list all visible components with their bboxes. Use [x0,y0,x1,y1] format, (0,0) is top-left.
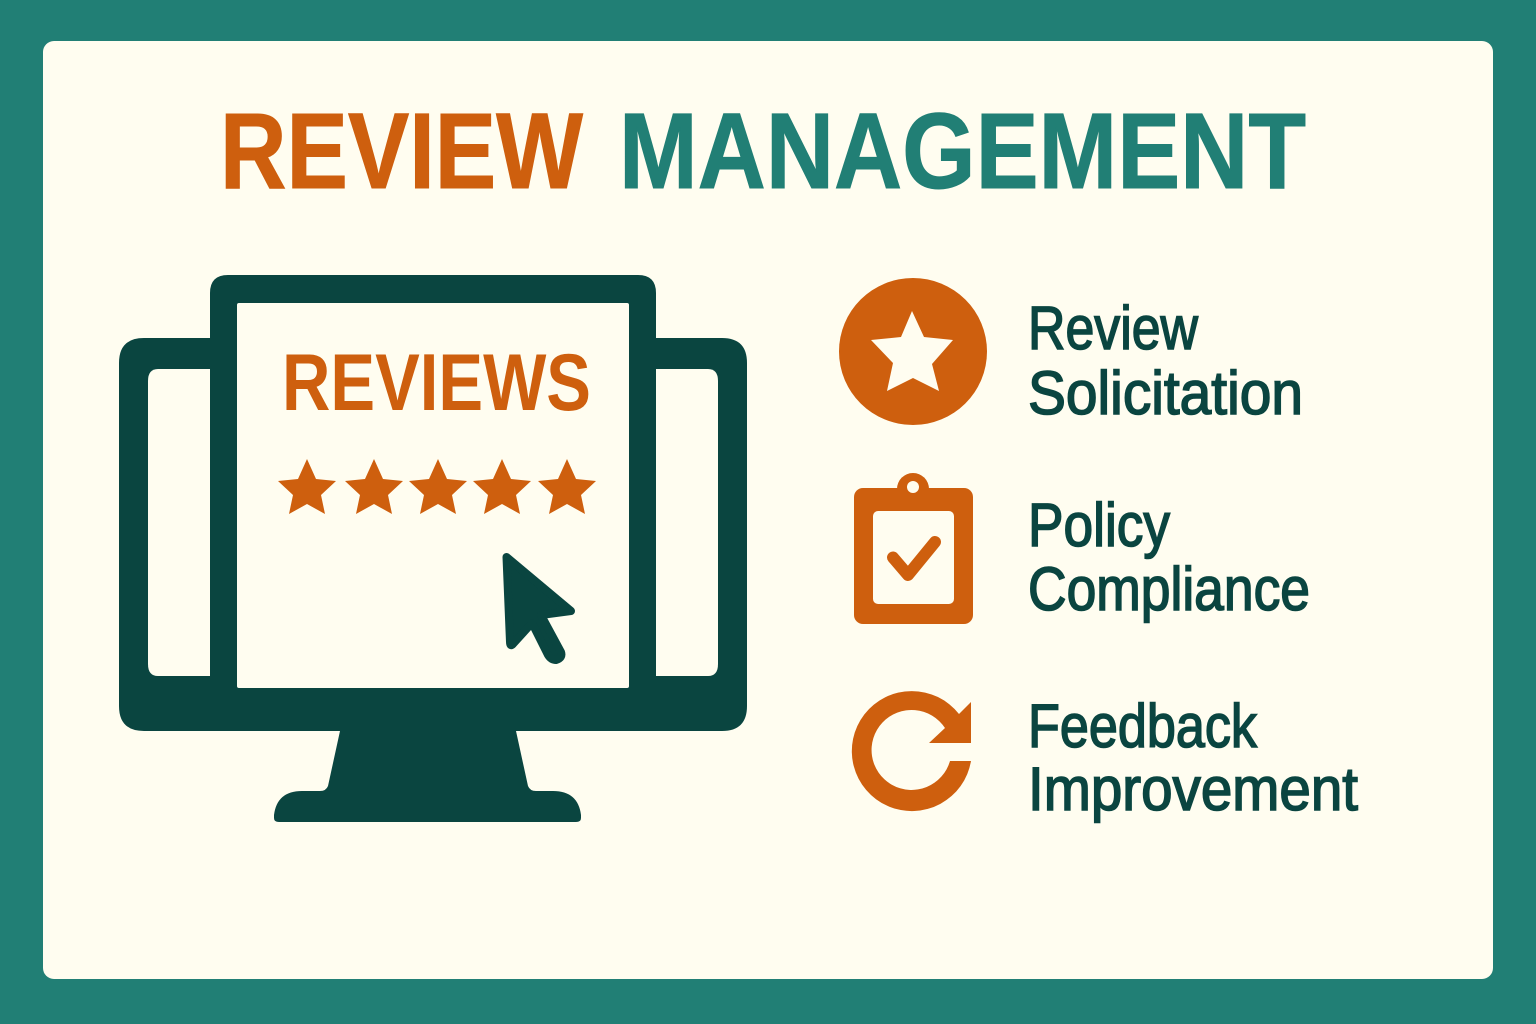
label: feedback improvement [1028,692,1358,823]
list item: review solicitation [839,278,1303,427]
line: Review: Review [1028,294,1199,362]
star 5 [538,459,596,514]
line: Compliance: Compliance [1028,555,1310,623]
right side window [656,369,718,676]
left side window [148,369,210,676]
icon: mouse cursor [506,557,571,660]
line: Improvement: Improvement [1028,755,1358,823]
icon: computer monitor with reviews screen [119,275,747,822]
line: Solicitation: Solicitation [1028,359,1303,427]
icon: clipboard with check [854,473,973,624]
label: policy compliance [1028,491,1310,623]
title [220,90,1306,211]
star 3 [409,459,467,514]
screen heading: Reviews: REVIEWS [282,338,591,428]
line: Feedback: Feedback [1028,692,1257,760]
icon: circular arrow [852,691,971,811]
star 2 [345,459,403,514]
monitor side body [119,275,747,822]
check mark [893,542,935,575]
list item: feedback improvement [852,691,1358,823]
clipboard paper [873,511,954,604]
line: Policy: Policy [1028,491,1170,559]
star 1 [278,459,336,514]
list item: policy compliance [854,473,1310,624]
main screen [237,303,629,688]
icon: star in circle [839,278,987,425]
white star [871,311,953,391]
clipboard board [854,488,973,624]
orange circle [839,278,987,425]
title word: Management: MANAGEMENT [619,90,1306,211]
star 4 [473,459,531,514]
label: review solicitation [1028,294,1303,427]
five star rating [278,459,596,514]
clipboard ring [897,473,929,505]
ring hole [907,481,919,493]
title word: Review: REVIEW [220,90,583,211]
